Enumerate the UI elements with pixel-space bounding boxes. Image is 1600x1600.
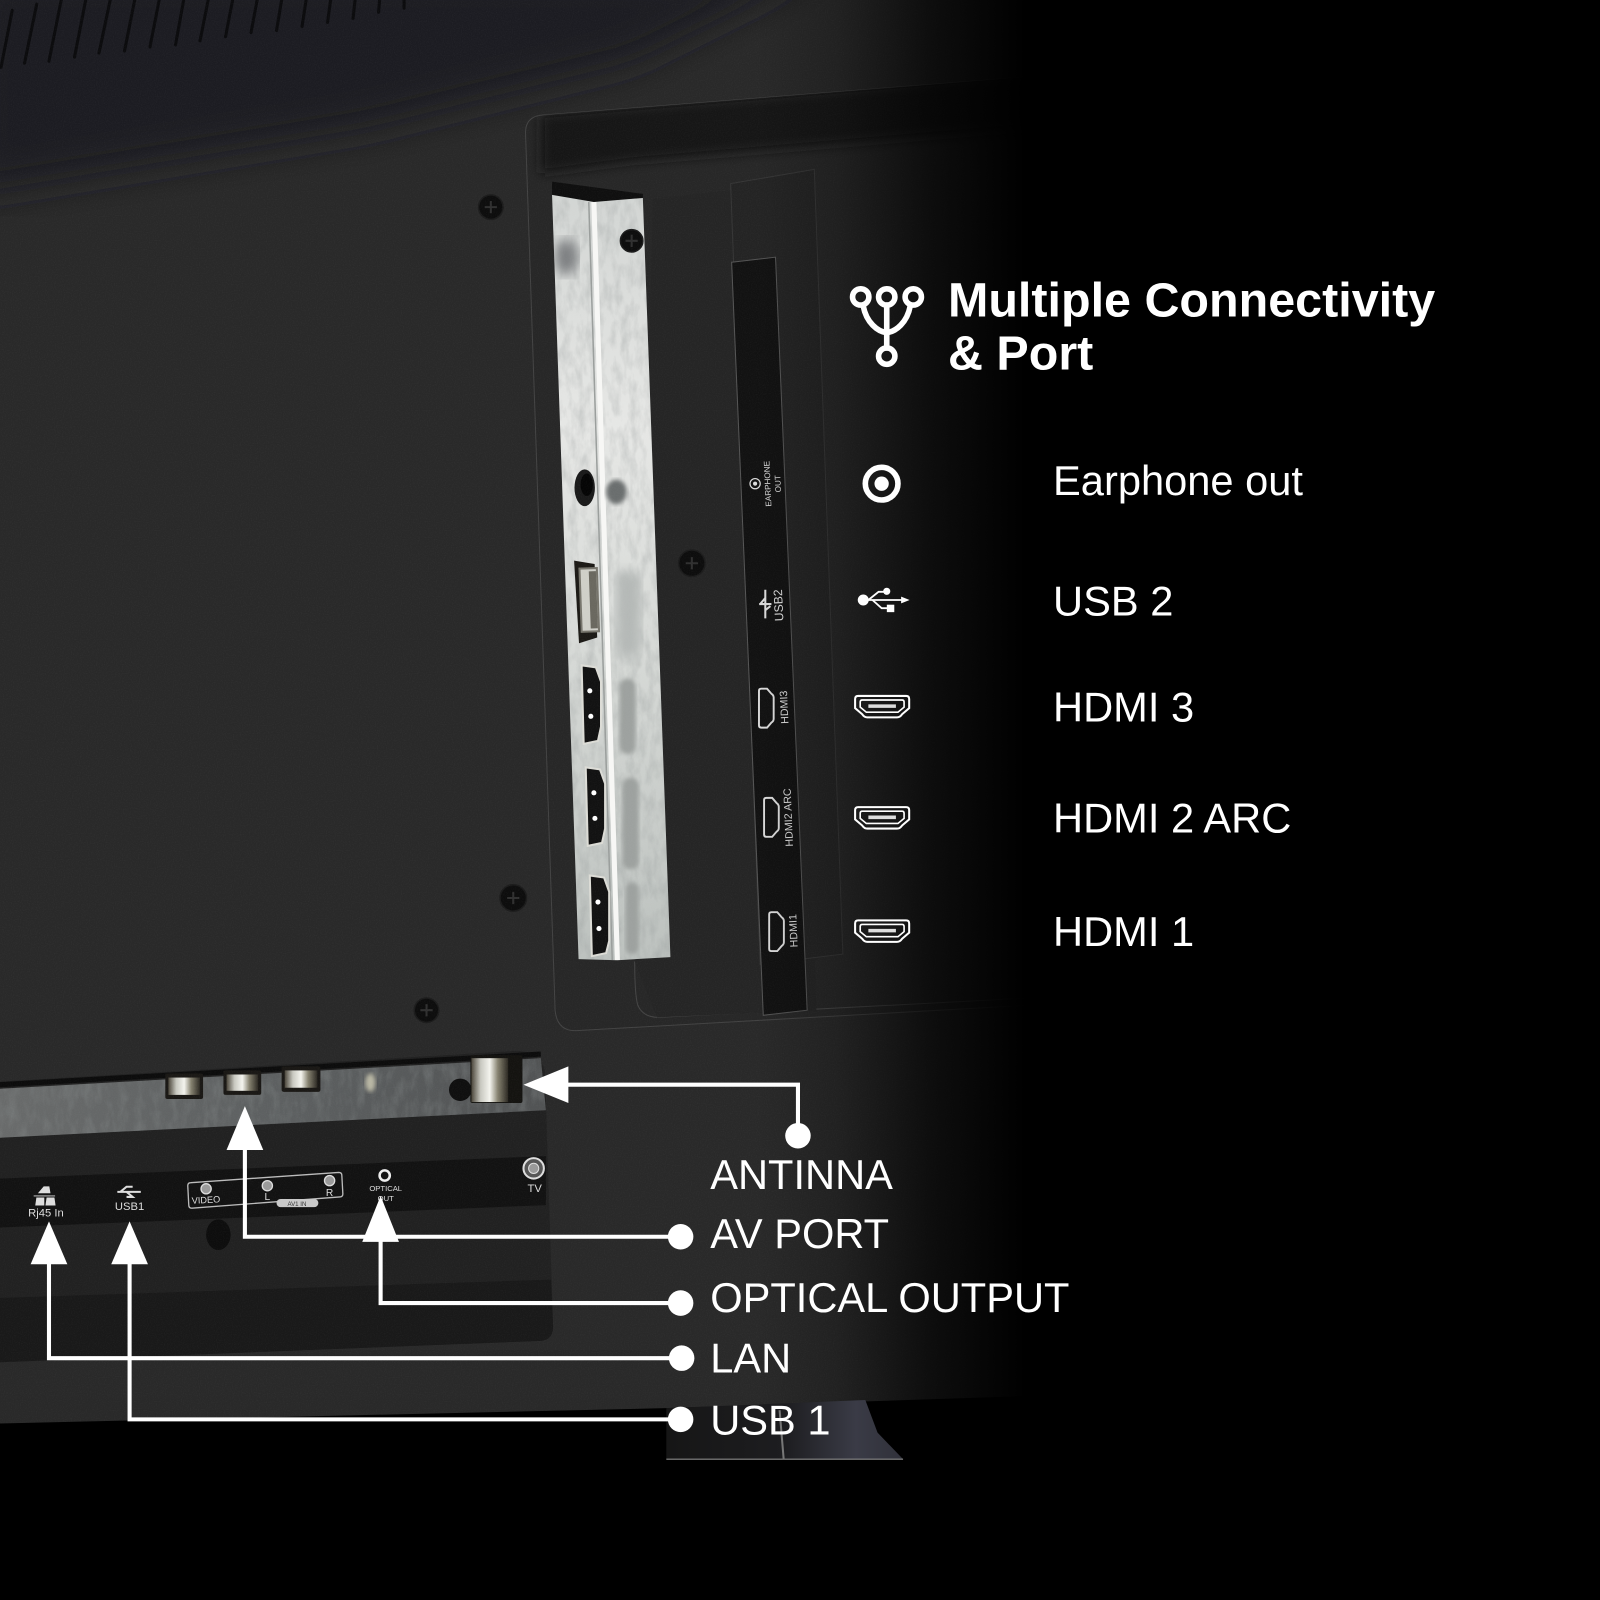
bay top shadow — [536, 83, 949, 176]
label: HDMI 3: HDMI 3 — [1053, 683, 1194, 730]
TV antenna label — [523, 1158, 544, 1195]
port label housing — [731, 169, 843, 964]
label: LAN: LAN — [710, 1334, 791, 1381]
heading: Multiple Connectivity — [948, 273, 1435, 327]
arrow: LAN callout — [31, 1221, 694, 1371]
AV input box: L — [265, 1192, 271, 1203]
HDMI3 label — [759, 689, 791, 728]
HDMI3 label: HDMI3 — [778, 690, 791, 724]
bay screw — [206, 1219, 231, 1250]
rear housing — [0, 0, 1031, 1423]
side port labels strip — [732, 257, 807, 1015]
label: OPTICAL OUTPUT: OPTICAL OUTPUT — [710, 1274, 1069, 1321]
HDMI2 ARC label: HDMI2 ARC — [782, 788, 796, 847]
label: Earphone out: Earphone out — [1053, 457, 1303, 504]
AV input box: R — [326, 1188, 333, 1199]
HDMI port 3 — [582, 665, 601, 744]
icon: HDMI 1 — [855, 920, 909, 942]
rear screw — [449, 1079, 471, 1101]
TV back photo — [0, 0, 1031, 1423]
HDMI port 2 — [586, 767, 605, 846]
icon: earphone jack — [865, 467, 898, 500]
bracket shadow flap — [552, 182, 643, 203]
icon: HDMI 3 — [855, 696, 909, 717]
optical out label — [369, 1170, 402, 1203]
label: USB 2: USB 2 — [1053, 577, 1173, 624]
earphone jack — [574, 469, 595, 506]
arrow: optical output callout — [362, 1196, 693, 1316]
earphone out label — [750, 460, 783, 507]
bottom connector bay — [0, 1051, 553, 1362]
HDMI1 label: HDMI1 — [787, 914, 801, 948]
RCA connector 3 — [282, 1066, 320, 1092]
earphone out label: OUT — [773, 475, 783, 493]
arrow: USB 1 callout — [111, 1221, 693, 1432]
icon: HDMI 2 ARC — [855, 807, 909, 829]
label: ANTINNA: ANTINNA — [710, 1151, 893, 1198]
top lip shadow — [0, 1054, 541, 1085]
recessed connector bay — [526, 77, 1031, 1031]
label: AV PORT: AV PORT — [710, 1210, 889, 1257]
heading: & Port — [948, 326, 1093, 380]
RCA connector 2 — [223, 1070, 261, 1095]
USB port — [574, 560, 599, 643]
HDMI1 label — [769, 912, 801, 951]
RCA connector 1 — [165, 1073, 203, 1099]
film grain — [10, 17, 776, 1296]
arrow: AV port callout — [227, 1106, 693, 1249]
TV stand — [666, 1400, 903, 1459]
label: HDMI 2 ARC: HDMI 2 ARC — [1053, 795, 1291, 842]
label: HDMI 1: HDMI 1 — [1053, 908, 1194, 955]
USB1 label — [115, 1187, 144, 1213]
antenna connector — [470, 1055, 522, 1103]
top shaded area with vents — [0, 0, 816, 194]
side metal port bracket — [552, 182, 670, 960]
bracket plate — [552, 195, 670, 960]
strip background — [732, 257, 807, 1015]
inner frame — [635, 961, 1031, 1017]
AV input box — [188, 1172, 343, 1208]
Rj45 label — [28, 1187, 64, 1219]
bay background — [0, 1051, 553, 1362]
heading icon: connectivity — [853, 289, 921, 364]
label: USB 1: USB 1 — [710, 1397, 831, 1444]
HDMI port 1 — [590, 876, 609, 956]
label strip — [0, 1156, 546, 1228]
icon: USB — [859, 589, 907, 611]
optical out label: OPTICAL — [369, 1184, 402, 1193]
arrow: antenna callout — [523, 1066, 811, 1148]
USB2 label: USB2 — [771, 589, 786, 622]
USB1 label: USB1 — [115, 1201, 144, 1213]
earphone out label: EARPHONE — [762, 460, 773, 507]
TV antenna label: TV — [528, 1183, 542, 1195]
HDMI2 ARC label — [764, 788, 796, 847]
lower dark band — [0, 1280, 553, 1362]
screws — [414, 195, 705, 1022]
Rj45 label: Rj45 In — [28, 1207, 64, 1219]
USB2 label — [759, 589, 786, 622]
AV input box: AV1 IN — [287, 1201, 306, 1208]
AV input box: VIDEO — [191, 1194, 220, 1206]
metal plate — [0, 1058, 546, 1138]
optical out label: OUT — [378, 1194, 394, 1203]
